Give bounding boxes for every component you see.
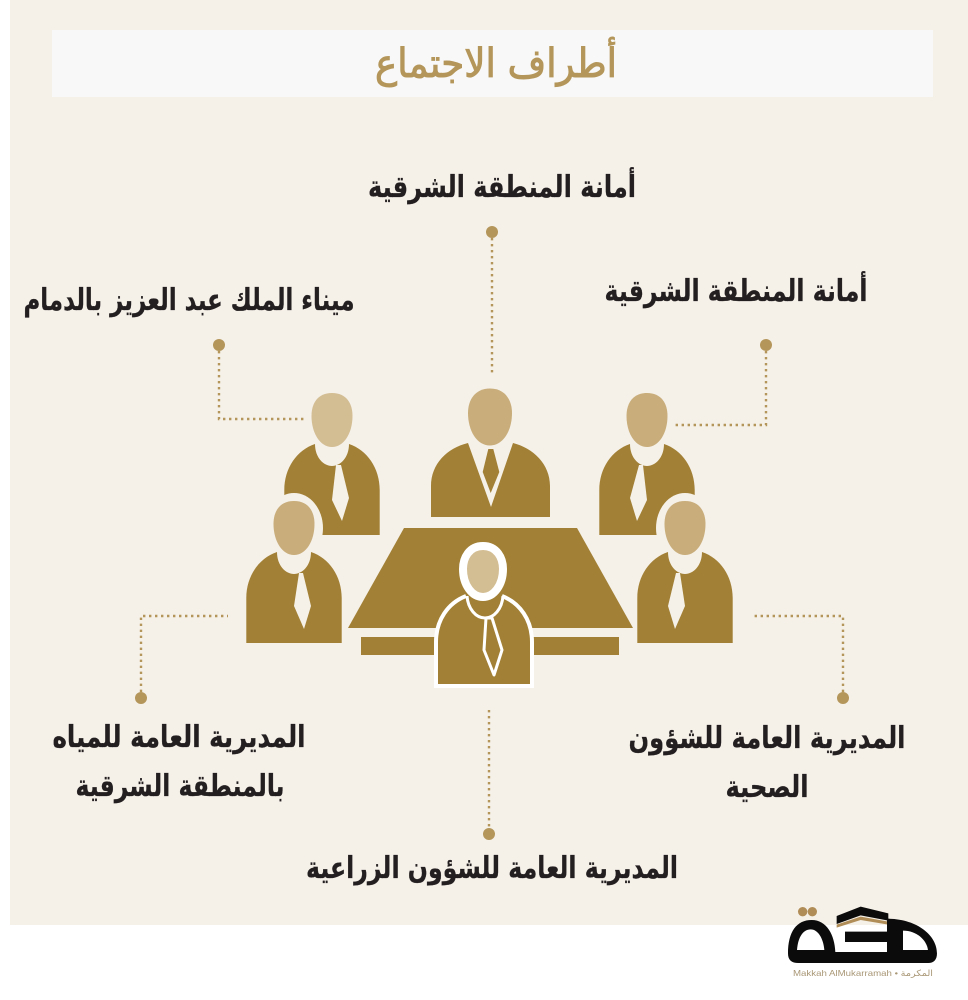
label: lower right line 1: المديرية العامة للشؤون (628, 721, 906, 756)
person: front center (436, 546, 532, 686)
connector: upper left (213, 339, 306, 419)
connector: bottom (483, 710, 495, 840)
person: front right (637, 493, 733, 643)
label: lower left line 1: المديرية العامة للمياه (52, 720, 306, 755)
logo wordmark: Makkah AlMukarramah • المكرمة (793, 968, 933, 978)
person: front left (246, 493, 342, 643)
connector: lower left (135, 616, 228, 704)
logo (788, 907, 937, 978)
title: أطراف الاجتماع (375, 37, 617, 87)
person: back center (431, 388, 550, 517)
label: lower right line 2: الصحية (726, 770, 808, 805)
person: back right (599, 393, 695, 535)
connector: upper right (672, 339, 772, 425)
label: upper left: ميناء الملك عبد العزيز بالدمام (24, 283, 354, 318)
label: lower left line 2: بالمنطقة الشرقية (76, 769, 284, 804)
connector: lower right (752, 616, 849, 704)
label: upper right: أمانة المنطقة الشرقية (604, 271, 868, 309)
title band (52, 30, 933, 97)
label: bottom: المديرية العامة للشؤون الزراعية (306, 851, 678, 886)
label: top: أمانة المنطقة الشرقية (368, 167, 636, 205)
table (348, 528, 633, 655)
connector: top (486, 226, 498, 373)
person: back left (284, 393, 380, 535)
